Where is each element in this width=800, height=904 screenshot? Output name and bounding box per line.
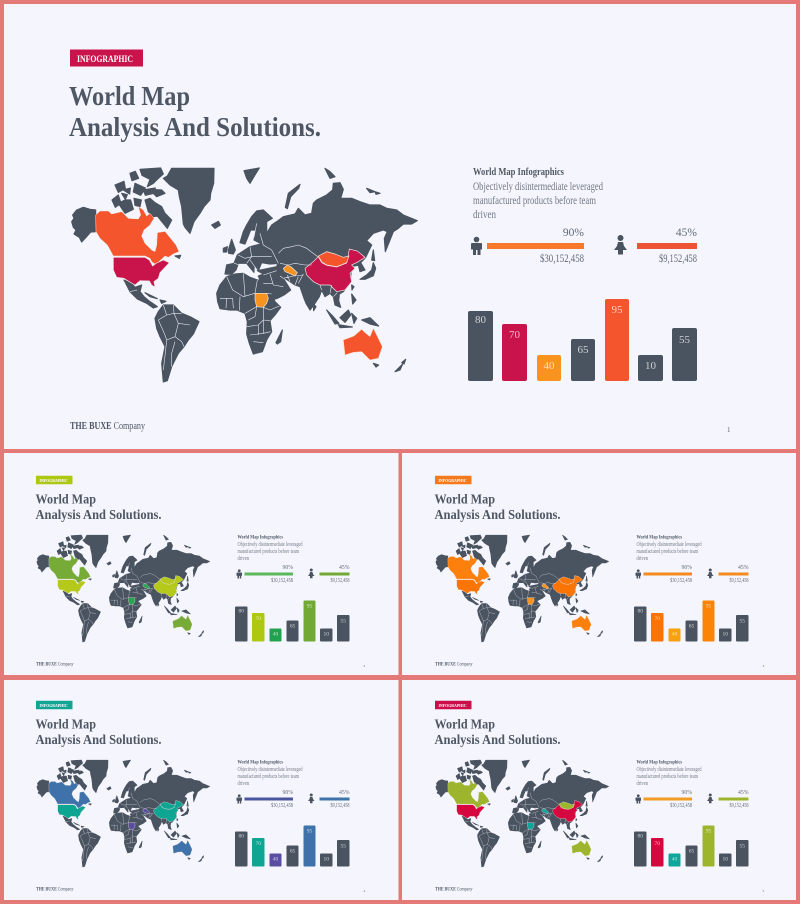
bar chart: 95 <box>307 604 312 610</box>
footer brand: THE BUXE Company <box>435 888 473 892</box>
bar chart: 65 <box>290 624 296 630</box>
footer brand: THE BUXE Company <box>36 888 74 892</box>
text block: description <box>238 536 303 562</box>
bar chart: 95 <box>706 604 712 610</box>
stat: men 90%: $30,152,458 <box>670 802 692 809</box>
icon: man <box>636 794 641 804</box>
bar chart: 55 <box>740 844 745 850</box>
title: World Map <box>36 716 96 732</box>
text block: description: manufactured products before team <box>238 548 299 555</box>
bar chart <box>634 826 748 866</box>
stat: men 90%: $30,152,458 <box>670 577 692 584</box>
tag: infographic: INFOGRAPHIC <box>40 703 68 708</box>
stat: women 45%: $9,152,458 <box>659 252 697 265</box>
text block: description <box>636 760 702 787</box>
stat: men 90%: 90% <box>681 790 692 796</box>
footer brand: THE BUXE Company <box>36 662 74 668</box>
stat: women 45%: 45% <box>738 790 749 796</box>
page number: 2 <box>364 664 366 668</box>
bar chart: 65 <box>290 848 296 854</box>
bar chart: 10 <box>324 856 329 862</box>
bar chart <box>468 299 697 381</box>
bar chart: 65 <box>689 624 694 630</box>
tag: infographic: INFOGRAPHIC <box>77 54 133 64</box>
stat: women 45%: $9,152,458 <box>330 802 350 809</box>
text block: description: driven <box>636 556 648 562</box>
tag: infographic: INFOGRAPHIC <box>40 478 68 483</box>
world map <box>37 535 210 642</box>
bar chart: 80 <box>475 314 486 326</box>
stat: men 90% <box>644 565 692 584</box>
bar chart: 40 <box>273 856 278 862</box>
stat: men 90%: 90% <box>282 790 293 796</box>
text block: description: Objectively disintermediate leveraged <box>238 767 303 773</box>
world map <box>436 760 609 867</box>
world map <box>72 168 417 382</box>
title <box>36 716 162 747</box>
stat: women 45%: $9,152,458 <box>730 802 749 809</box>
stat: women 45%: 45% <box>339 565 350 571</box>
title: World Map <box>434 492 495 506</box>
bar chart: 40 <box>672 632 678 638</box>
page number: 3 <box>762 664 764 668</box>
text block: description <box>473 167 603 221</box>
icon: woman <box>614 235 627 254</box>
bar chart: 70 <box>509 329 520 341</box>
tag: infographic: INFOGRAPHIC <box>438 478 466 483</box>
text block: description: driven <box>636 781 648 787</box>
stat: women 45% <box>320 790 350 809</box>
bar chart: 55 <box>340 618 346 624</box>
title: World Map <box>36 492 96 506</box>
title: Analysis And Solutions. <box>434 507 560 522</box>
stat: men 90% <box>644 790 692 809</box>
title: Analysis And Solutions. <box>36 732 162 747</box>
text block: description: manufactured products before team <box>238 773 299 780</box>
bar chart: 55 <box>740 618 745 624</box>
stat: men 90%: 90% <box>681 565 692 571</box>
icon: man <box>236 794 242 804</box>
text block: description: Objectively disintermediate leveraged <box>636 542 702 548</box>
text block: description: Objectively disintermediate leveraged <box>473 181 603 193</box>
bar chart <box>235 826 350 866</box>
icon: woman <box>308 794 314 803</box>
bar chart: 65 <box>578 344 589 356</box>
text block: description: manufactured products before team <box>473 195 596 207</box>
bar chart <box>634 600 748 642</box>
text block: description <box>636 536 702 562</box>
bar chart: 10 <box>722 856 728 862</box>
tag: infographic <box>435 476 472 484</box>
text block: description: manufactured products before team <box>636 773 698 780</box>
world map <box>436 535 609 642</box>
tag: infographic <box>36 701 72 709</box>
bar chart: 80 <box>638 608 643 614</box>
stat: men 90% <box>244 565 293 584</box>
icon: man <box>636 569 641 578</box>
stat: women 45% <box>320 565 350 584</box>
title <box>434 716 560 747</box>
title: World Map <box>69 81 190 111</box>
page number: 5 <box>762 889 764 893</box>
panel: crimson slide <box>402 680 796 900</box>
icon: woman <box>707 568 714 578</box>
bar chart: 55 <box>340 844 346 850</box>
stat: women 45%: $9,152,458 <box>730 577 749 584</box>
panel: blue slide <box>4 680 398 900</box>
world map <box>37 760 210 867</box>
text block: description: driven <box>238 781 249 787</box>
stat: men 90% <box>487 227 584 265</box>
panel: main slide <box>4 4 796 449</box>
bar chart: 40 <box>544 360 555 372</box>
bar chart: 10 <box>324 632 329 638</box>
text block: description: Objectively disintermediate leveraged <box>238 542 303 548</box>
stat: women 45% <box>637 227 697 265</box>
footer brand: THE BUXE Company <box>435 662 473 668</box>
text block: description: manufactured products before team <box>636 548 698 555</box>
title: Analysis And Solutions. <box>69 112 321 142</box>
bar chart: 80 <box>238 608 244 614</box>
bar chart: 95 <box>307 828 312 834</box>
page number: 1 <box>727 426 731 434</box>
bar chart: 95 <box>612 304 623 316</box>
title <box>36 492 162 522</box>
bar chart: 70 <box>256 841 261 847</box>
stat: women 45% <box>718 790 749 809</box>
stat: men 90%: 90% <box>282 565 293 571</box>
panel: orange slide <box>402 453 796 675</box>
bar chart: 95 <box>706 828 712 834</box>
stat: women 45%: $9,152,458 <box>330 577 350 584</box>
bar chart: 80 <box>638 834 643 840</box>
text block: description: World Map Infographics <box>636 760 682 766</box>
stat: women 45% <box>718 565 749 584</box>
bar chart: 40 <box>672 856 678 862</box>
bar chart: 80 <box>238 834 244 840</box>
stat: men 90%: $30,152,458 <box>540 252 584 265</box>
stat: men 90% <box>244 790 293 809</box>
text block: description: World Map Infographics <box>238 760 283 766</box>
tag: infographic <box>435 701 472 709</box>
bar chart <box>235 600 350 642</box>
stat: women 45%: 45% <box>676 227 697 239</box>
bar chart: 10 <box>645 360 656 372</box>
stat: women 45%: 45% <box>339 790 350 796</box>
text block: description: Objectively disintermediate leveraged <box>636 767 702 773</box>
text block: description: World Map Infographics <box>636 536 682 540</box>
title <box>434 492 560 522</box>
bar chart: 55 <box>679 334 690 346</box>
tag: infographic <box>36 476 72 484</box>
tag: infographic: INFOGRAPHIC <box>438 703 466 708</box>
icon: woman <box>707 794 714 803</box>
page number: 4 <box>364 889 366 893</box>
tag: infographic <box>70 50 143 66</box>
stat: women 45%: 45% <box>738 565 749 571</box>
title: Analysis And Solutions. <box>434 732 560 747</box>
icon: man <box>236 569 242 578</box>
bar chart: 70 <box>654 616 660 622</box>
stat: men 90%: 90% <box>563 227 584 239</box>
stat: men 90%: $30,152,458 <box>271 802 293 809</box>
text block: description: driven <box>238 556 249 562</box>
text block: description: World Map Infographics <box>238 536 283 540</box>
icon: man <box>471 237 482 255</box>
title: Analysis And Solutions. <box>36 507 162 522</box>
bar chart: 65 <box>689 848 694 854</box>
stat: men 90%: $30,152,458 <box>271 577 293 584</box>
panel: green slide <box>4 453 398 675</box>
bar chart: 70 <box>654 841 660 847</box>
title <box>69 81 321 142</box>
text block: description: driven <box>473 209 496 221</box>
title: World Map <box>434 716 495 732</box>
text block: description: World Map Infographics <box>473 167 564 178</box>
footer brand: THE BUXE Company <box>70 421 145 432</box>
icon: woman <box>308 568 314 578</box>
bar chart: 10 <box>722 632 728 638</box>
bar chart: 40 <box>273 632 278 638</box>
text block: description <box>238 760 303 787</box>
bar chart: 70 <box>256 616 261 622</box>
